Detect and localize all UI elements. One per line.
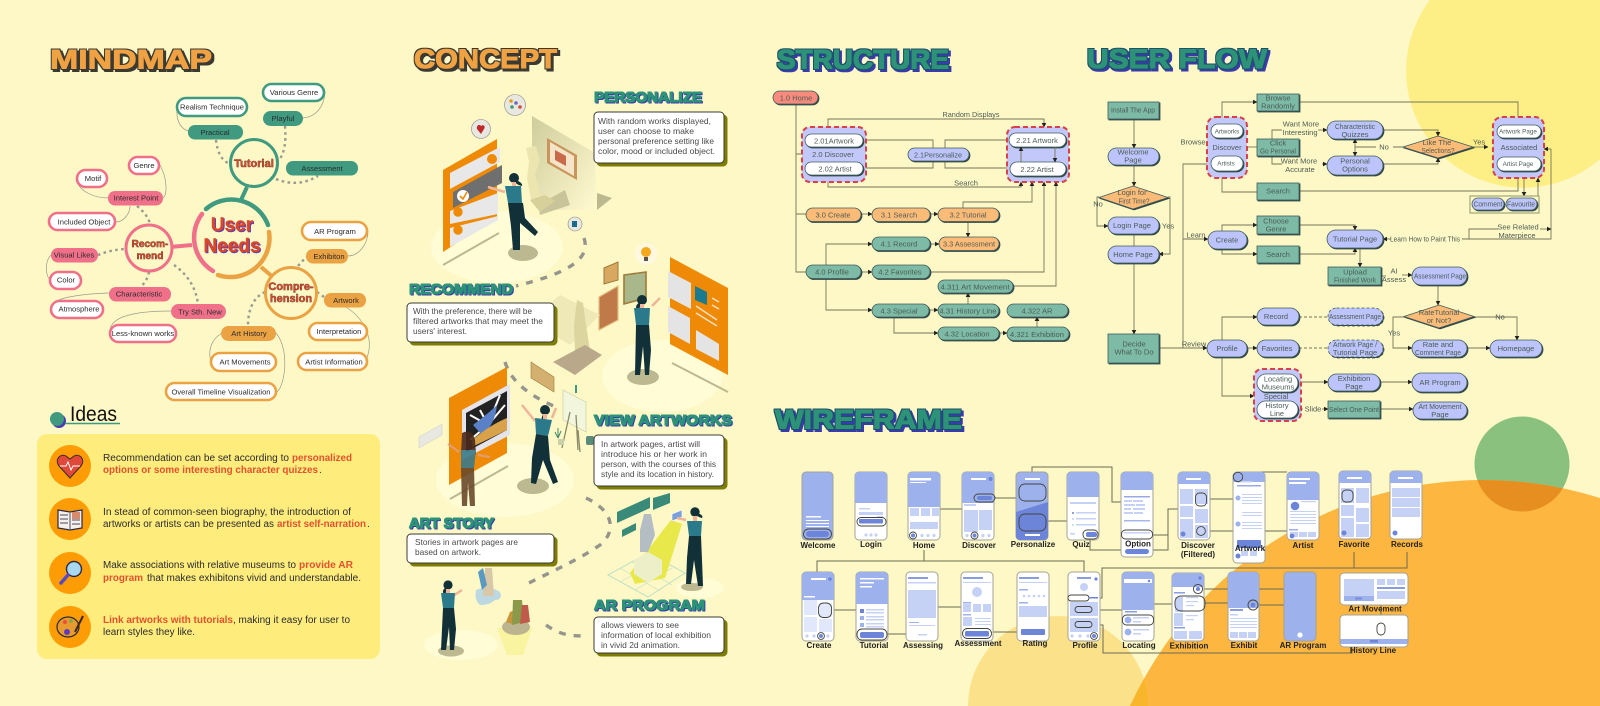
wireframe: home: Home — [913, 541, 936, 550]
wireframe: quiz — [1067, 472, 1099, 549]
tutorial branch: Various Genre — [270, 88, 318, 97]
recommend branch: Atmosphere — [59, 304, 99, 314]
profile nodes: 4.321 Exhibition — [1010, 330, 1064, 339]
panel: concept — [407, 89, 732, 660]
connector labels: Learn — [1186, 230, 1206, 240]
structure connectors — [796, 104, 1056, 333]
group: artwork and artist: 2.22 Artist — [1020, 165, 1055, 174]
wireframe: tutorial — [856, 572, 888, 650]
onboarding steps: Login for — [1117, 188, 1147, 197]
callout: recommend: RECOMMEND — [409, 281, 513, 298]
decorative background circles — [968, 0, 1600, 706]
connector labels: Materpiece — [1498, 231, 1536, 240]
node: comprehension: Compre- — [268, 281, 314, 293]
wireframe: option: Option — [1125, 540, 1151, 548]
node: comprehension: hension — [270, 293, 312, 305]
wireframe: ar program — [1280, 572, 1326, 650]
illustration: art story scene — [438, 568, 532, 656]
wireframe: artwork: Artwork — [1235, 544, 1266, 553]
node: personalize — [908, 148, 969, 161]
callout: recommend — [407, 281, 554, 342]
wireframe: art movement — [1340, 573, 1408, 614]
callout: personalize — [594, 89, 724, 163]
wireframe: locating — [1122, 572, 1156, 650]
illustration: recommend scene — [530, 243, 728, 392]
wireframe: personalize — [1011, 472, 1056, 549]
node: home: 1.0 Home — [780, 94, 812, 102]
idea 3: that makes exhibitons vivid and understandable. — [147, 573, 361, 584]
recommend branch: Try Sth. New — [178, 308, 222, 316]
callout: personalize: user can choose to make — [598, 126, 694, 136]
connector labels: Slide — [1305, 404, 1321, 414]
wireframe: records — [1390, 471, 1424, 549]
node: home — [773, 91, 818, 104]
node: tutorial: Tutorial — [234, 158, 274, 170]
connector labels: No — [1495, 312, 1505, 322]
idea 1: personalized — [292, 453, 352, 464]
group: artwork and artist — [1007, 127, 1069, 182]
dashed journey paths — [505, 238, 610, 636]
create group: Search — [1266, 250, 1290, 259]
wireframe: profile — [1068, 572, 1100, 650]
recommend branch: Color — [57, 276, 76, 284]
browse group: Artists — [1217, 160, 1235, 168]
wireframe: quiz: Quiz — [1072, 540, 1090, 549]
idea 2: . — [367, 519, 370, 530]
onboarding steps — [1099, 102, 1168, 363]
heading: structure: STRUCTURE — [777, 44, 949, 74]
onboarding steps: Decide — [1122, 340, 1146, 348]
profile nodes: 4.311 Art Movement — [940, 282, 1010, 292]
tutorial branch: Playful — [272, 114, 295, 123]
illustration: view artworks scene — [419, 362, 594, 506]
callout: recommend: users' interest. — [413, 326, 467, 336]
profile group: Profile — [1216, 344, 1238, 353]
onboarding steps: Login Page — [1113, 221, 1151, 230]
connector labels: AI — [1390, 266, 1398, 276]
wireframe: profile: Profile — [1073, 641, 1098, 650]
special group: History — [1265, 401, 1289, 410]
profile nodes: 4.1 Record — [881, 240, 917, 248]
profile group: Rate and — [1423, 340, 1453, 349]
mindmap connector lines — [46, 92, 369, 392]
heading: ideas: Ideas — [70, 403, 117, 426]
profile group: Comment Page — [1415, 348, 1461, 357]
idea 2: artworks or artists can be presented as — [103, 519, 274, 530]
callout: ar program — [594, 597, 724, 653]
callout: personalize: color, mood or included object. — [598, 146, 715, 156]
recommend branch: Genre — [133, 161, 155, 170]
profile nodes: 4.32 Location — [944, 330, 990, 338]
connector labels — [942, 110, 1000, 188]
callout: ar program: AR PROGRAM — [594, 597, 705, 614]
special group: Select One Point — [1329, 405, 1380, 414]
connector labels: Browse — [1180, 138, 1206, 146]
connector labels: Yes — [1388, 328, 1400, 338]
browse group: Artist Page — [1503, 161, 1534, 168]
wireframe: art movement: Art Movement — [1348, 604, 1402, 614]
create group: Upload — [1343, 268, 1367, 276]
profile nodes: 4.3 Special — [880, 306, 918, 316]
central node: user needs: User — [211, 215, 254, 236]
browse group: Associated — [1501, 143, 1537, 152]
create group: Genre — [1266, 224, 1286, 234]
special group: AR Program — [1419, 378, 1461, 387]
idea 1: options or some interesting character quizzes — [103, 465, 318, 476]
browse group: Go Personal — [1260, 146, 1296, 156]
connector labels: Yes — [1473, 138, 1485, 146]
wireframe: locating: Locating — [1122, 641, 1156, 650]
callout: personalize: personal preference setting like — [598, 136, 714, 146]
heading: wireframe: WIREFRAME — [775, 404, 962, 434]
create group — [1208, 216, 1474, 328]
wireframe: ar program: AR Program — [1280, 641, 1326, 650]
browse group: Artworks — [1215, 128, 1239, 136]
wireframe: history line — [1340, 615, 1408, 655]
wireframe: history line: History Line — [1350, 646, 1397, 655]
special group: Art Movement — [1418, 402, 1462, 411]
browse group: Personal — [1340, 156, 1370, 166]
create nodes: 3.1 Search — [881, 210, 917, 220]
wireframe: artist: Artist — [1293, 541, 1314, 550]
callout: personalize: With random works displayed, — [598, 116, 711, 126]
onboarding steps: Welcome — [1117, 148, 1149, 156]
browse group — [1207, 94, 1544, 213]
recommend branch: Visual Likes — [54, 250, 94, 260]
idea 4: , making it easy for user to — [233, 615, 350, 626]
onboarding steps: First Time? — [1118, 196, 1150, 206]
comprehension branch: Artist Information — [305, 358, 363, 366]
onboarding steps: Install The App — [1111, 106, 1155, 114]
create group: Finished Work — [1334, 276, 1376, 284]
idea 3: Make associations with relative museums to — [103, 560, 296, 571]
callout: ar program: in vivid 2d animation. — [601, 640, 680, 650]
idea 4 — [49, 606, 350, 648]
recommend branch: Motif — [85, 174, 102, 183]
connector labels — [1093, 120, 1539, 414]
connector labels: Yes — [1162, 222, 1174, 230]
wireframe connectors — [817, 467, 1407, 653]
group: discover — [802, 127, 866, 182]
browse group: Characteristic — [1335, 122, 1375, 131]
group: discover: 2.01Artwork — [814, 136, 854, 146]
comprehension branch: Artwork — [333, 296, 359, 305]
connector labels: Accurate — [1285, 165, 1315, 174]
profile nodes — [806, 237, 1069, 340]
wireframe: discover: Discover — [962, 541, 996, 550]
browse group: Artwork Page — [1499, 128, 1537, 136]
illustration: ar program scene — [608, 493, 703, 597]
connector labels: Random Displays — [942, 110, 1000, 119]
tutorial branch — [177, 84, 358, 176]
recommend branch: Interest Point — [114, 194, 159, 202]
idea 1: Recommendation can be set according to — [103, 453, 289, 464]
heading: user flow: USER FLOW — [1087, 44, 1268, 74]
wireframe: rating: Rating — [1023, 639, 1048, 648]
profile group — [1207, 308, 1542, 357]
profile group: Assessment Page — [1329, 312, 1381, 321]
heading: concept: CONCEPT — [414, 44, 558, 74]
profile group: Tutorial Page — [1333, 348, 1377, 357]
panel: user flow diagram — [1093, 94, 1551, 421]
onboarding steps: What To Do — [1114, 348, 1154, 356]
wireframe: favorite — [1338, 471, 1371, 549]
callout: ar program: allows viewers to see — [601, 620, 679, 630]
connector labels: See Related — [1497, 222, 1539, 232]
create nodes: 3.2 Tutorial — [949, 210, 987, 220]
central node: user needs: Needs — [203, 236, 261, 257]
idea 4: Link artworks with tutorials — [103, 615, 233, 626]
node: personalize: 2.1Personalize — [914, 150, 962, 160]
profile group: Record — [1264, 312, 1288, 321]
wireframe: discover filtered: Discover — [1181, 541, 1215, 550]
wireframe: discover filtered: (Filtered) — [1181, 550, 1215, 559]
profile group: Favorites — [1262, 344, 1293, 353]
idea 3: program — [103, 573, 143, 584]
heading: ideas — [50, 403, 120, 428]
create nodes: 3.0 Create — [815, 210, 851, 220]
recommend branch: Included Object — [58, 218, 111, 226]
browse group: Browse — [1265, 94, 1291, 102]
central node: user needs — [194, 200, 269, 277]
wireframe: tutorial: Tutorial — [860, 641, 888, 650]
callout: view artworks: style and its location in history. — [601, 469, 714, 479]
connector labels: No — [1093, 200, 1103, 208]
comprehension branch: Art Movements — [219, 358, 271, 366]
wireframe: option — [1121, 472, 1153, 557]
recommend branch: Less-known works — [112, 329, 174, 338]
comprehension branch: Art History — [231, 329, 267, 338]
profile group: Artwork Page / — [1333, 340, 1378, 349]
idea 3: provide AR — [299, 560, 354, 571]
comprehension branch: Overall Timeline Visualization — [171, 388, 271, 396]
callout: art story: Stories in artwork pages are — [415, 537, 518, 547]
create group: Choose — [1263, 216, 1289, 226]
browse group: Like The — [1423, 138, 1451, 147]
idea 4: learn styles they like. — [103, 627, 195, 638]
wireframe: rating — [1017, 572, 1049, 648]
callout: view artworks: introduce his or her work in — [601, 449, 707, 459]
wireframe: exhibit — [1228, 572, 1259, 650]
create group: Tutorial Page — [1333, 234, 1377, 244]
callout: recommend: filtered artworks that may meet the — [413, 316, 543, 326]
wireframe: create — [802, 572, 834, 650]
wireframe: home — [908, 472, 940, 550]
comprehension branch: AR Program — [314, 227, 356, 236]
profile nodes: 4.2 Favorites — [878, 268, 922, 276]
recommend branch: Characteristic — [116, 290, 162, 298]
idea 1: . — [319, 465, 322, 476]
heading: mindmap: MINDMAP — [50, 44, 212, 74]
create group: or Not? — [1427, 316, 1451, 325]
onboarding steps: Page — [1124, 156, 1142, 164]
callout: art story — [407, 515, 554, 563]
special group: Museums — [1262, 382, 1295, 392]
node: comprehension — [266, 268, 316, 318]
wireframe: create: Create — [807, 641, 832, 650]
profile group: Homepage — [1498, 344, 1534, 353]
connector labels: No — [1379, 142, 1389, 152]
comprehension branch — [166, 222, 367, 400]
connector labels: Search — [954, 178, 978, 188]
wireframe: assessment: Assessment — [954, 639, 1002, 648]
wireframe: login: Login — [860, 540, 882, 549]
wireframe: assessing: Assessing — [903, 641, 943, 650]
create group: Create — [1216, 236, 1238, 244]
illustration: personalize scene — [443, 94, 612, 265]
panel: mindmap — [46, 84, 369, 400]
panel: structure diagram — [773, 91, 1069, 340]
connector labels: Interesting — [1282, 128, 1318, 137]
profile nodes: 4.322 AR — [1022, 306, 1053, 316]
onboarding steps: Home Page — [1113, 250, 1153, 259]
callout: recommend: With the preference, there will be — [413, 306, 532, 316]
special group: Exhibition — [1338, 374, 1370, 383]
group: discover: 2.0 Discover — [812, 150, 854, 159]
node: recommend: mend — [137, 251, 163, 262]
special group: Line — [1270, 409, 1284, 418]
connector labels: Assess — [1382, 275, 1406, 284]
callout: art story: ART STORY — [409, 515, 494, 532]
wireframe: artist — [1287, 472, 1319, 550]
browse group: Discover — [1212, 143, 1242, 152]
special group: Page — [1345, 382, 1363, 391]
node: recommend — [126, 225, 172, 271]
callout: view artworks — [594, 412, 732, 486]
browse group: Options — [1342, 164, 1368, 174]
browse group: Favourite — [1507, 200, 1535, 208]
connector labels: Learn How to Paint This — [1390, 234, 1460, 244]
special group: Page — [1431, 410, 1449, 419]
tutorial branch: Assessment — [301, 164, 344, 173]
wireframe: personalize: Personalize — [1011, 540, 1056, 549]
profile nodes: 4.31 History Line — [940, 306, 996, 316]
user flow connectors — [1097, 102, 1551, 409]
connector labels: Review — [1182, 340, 1207, 348]
wireframe: artwork — [1233, 472, 1266, 563]
connector labels: Want More — [1283, 120, 1319, 128]
callout: view artworks: person, with the courses of this — [601, 459, 716, 469]
create nodes — [806, 208, 999, 250]
profile nodes: 4.0 Profile — [815, 268, 849, 276]
wireframe: records: Records — [1391, 540, 1424, 549]
special group: Special — [1264, 392, 1289, 401]
wireframe: assessment — [954, 572, 1002, 648]
comprehension branch: Interpretation — [317, 327, 361, 336]
wireframe: welcome — [801, 472, 836, 550]
speech bubbles — [472, 94, 582, 231]
recommend branch — [49, 157, 226, 342]
callout: view artworks: VIEW ARTWORKS — [594, 412, 732, 429]
idea 3 — [49, 552, 361, 594]
wireframe: favorite: Favorite — [1338, 540, 1370, 549]
create group: RateTutorial — [1419, 308, 1460, 317]
callout: view artworks: In artwork pages, artist will — [601, 439, 700, 449]
wireframe: exhibit: Exhibit — [1231, 641, 1258, 650]
group: discover: 2.02 Artist — [818, 164, 853, 174]
callout: personalize: PERSONALIZE — [594, 89, 702, 106]
group: artwork and artist: 2.21 Artwork — [1016, 136, 1058, 145]
panel: wireframes — [801, 467, 1424, 655]
panel: ideas — [37, 434, 380, 659]
browse group: Randomly — [1261, 102, 1295, 110]
callout: ar program: information of local exhibition — [601, 630, 711, 640]
idea 2 — [49, 498, 370, 540]
tutorial branch: Practical — [200, 128, 230, 137]
wireframe: discover — [962, 472, 996, 550]
wireframe: login — [855, 472, 887, 549]
browse group: Selections? — [1422, 146, 1454, 155]
floor glows — [424, 211, 724, 660]
create group: Assessment Page — [1414, 272, 1466, 280]
idea 2: artist self-narration — [277, 519, 366, 530]
special group — [1254, 369, 1467, 421]
browse group: Comment — [1474, 200, 1503, 208]
comprehension branch: Exhibiton — [313, 252, 345, 261]
wireframe: exhibition — [1170, 573, 1208, 650]
browse group: Quizzes — [1341, 130, 1369, 139]
idea 2: In stead of common-seen biography, the introduction of — [103, 507, 351, 518]
wireframe: discover filtered — [1178, 472, 1215, 559]
callout: art story: based on artwork. — [415, 547, 481, 557]
wireframe: assessing — [903, 572, 943, 650]
idea 1 — [49, 445, 352, 487]
browse group: Search — [1266, 186, 1290, 196]
wireframe: welcome: Welcome — [801, 541, 836, 550]
browse group: Click — [1270, 138, 1286, 148]
node: recommend: Recom- — [132, 239, 168, 250]
create nodes: 3.3 Assessment — [943, 240, 996, 248]
connector labels: Want More — [1281, 156, 1317, 166]
special group: Locating — [1264, 374, 1292, 384]
node: tutorial — [230, 140, 278, 186]
wireframe: exhibition: Exhibition — [1170, 642, 1208, 650]
tutorial branch: Realism Technique — [180, 102, 244, 112]
